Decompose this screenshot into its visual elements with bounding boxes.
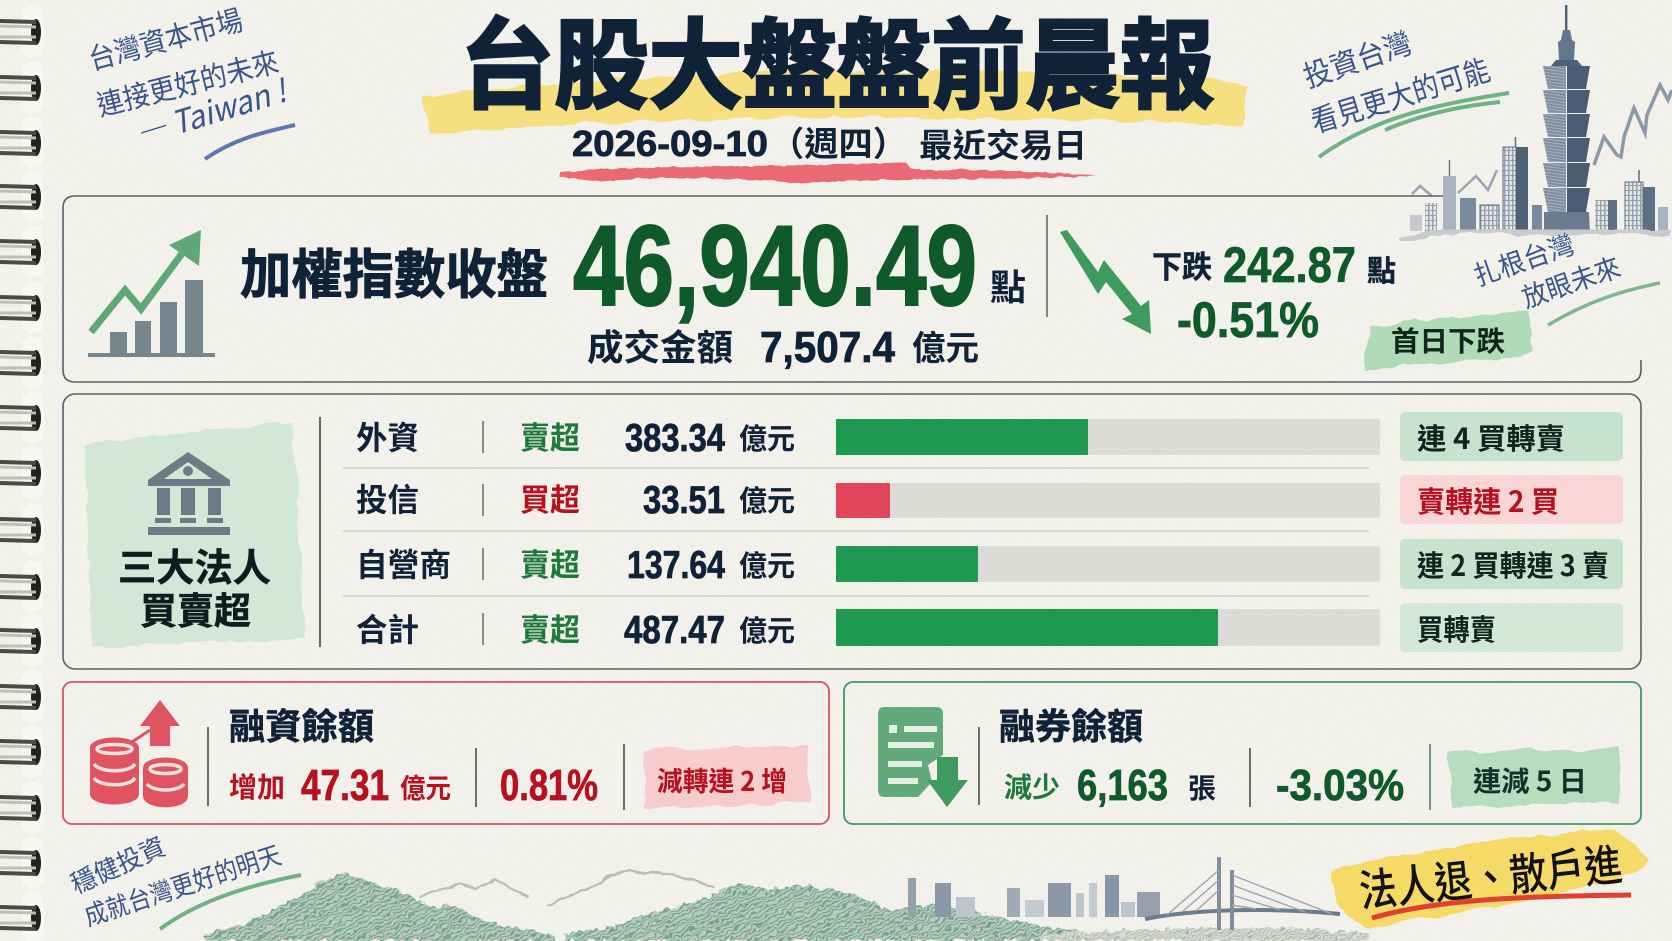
badge: first day down: 首日下跌 xyxy=(1391,320,1505,360)
illustration: city and bridge xyxy=(908,857,1340,930)
turnover: 7,507.4 xyxy=(760,323,895,372)
handwritten note: mid right: 放眼未來 xyxy=(1516,245,1625,316)
margin change value: 增加 xyxy=(229,766,285,806)
row: investment trust xyxy=(356,475,1623,524)
row: total xyxy=(356,603,1623,652)
turnover xyxy=(587,319,979,372)
index change xyxy=(1152,237,1396,348)
index change: 242.87 xyxy=(1223,237,1356,293)
row: dealers: 賣超 xyxy=(520,540,580,585)
badge: margin trend xyxy=(642,746,811,810)
spiral notebook binding xyxy=(0,5,44,941)
badge: short trend: 連減 5 日 xyxy=(1473,760,1587,800)
handwritten note: top right: 投資台灣 xyxy=(1297,18,1417,97)
panel: margin balance xyxy=(63,682,829,824)
handwritten note: bottom left: 成就台灣更好的明天 xyxy=(79,835,285,934)
row: dealers xyxy=(356,539,1623,589)
heading: index label: 加權指數收盤 xyxy=(240,233,548,309)
row: total: 買轉賣 xyxy=(1417,607,1496,649)
row: investment trust: 賣轉連 2 買 xyxy=(1417,479,1559,521)
icon: coins with up arrow xyxy=(90,700,188,807)
index value: 46,940.49 xyxy=(573,203,977,330)
illustration: mountains xyxy=(205,870,1370,941)
margin change value: 億元 xyxy=(400,767,451,806)
handwritten note: top right: 看見更大的可能 xyxy=(1305,45,1495,142)
short change value: 減少 xyxy=(1004,766,1060,806)
row: investment trust: 億元 xyxy=(739,478,795,520)
handwritten note: mid right: 扎根台灣 xyxy=(1468,223,1579,294)
row: foreign investors: 億元 xyxy=(739,416,795,458)
row: investment trust: 投信 xyxy=(356,475,419,521)
row: dealers: 連 2 買轉連 3 賣 xyxy=(1417,543,1609,585)
badge: short trend xyxy=(1450,748,1620,808)
date line with red underline xyxy=(560,117,1097,183)
row: total: 賣超 xyxy=(520,605,580,650)
handwritten note: top left xyxy=(83,0,295,159)
icon: falling arrow xyxy=(1060,230,1151,334)
handwritten note: mid right xyxy=(1468,223,1660,325)
row: investment trust: 33.51 xyxy=(643,479,725,522)
handwritten note: top left: 連接更好的未來 xyxy=(92,39,283,125)
badge: margin trend: 減轉連 2 增 xyxy=(657,760,787,799)
turnover: 成交金額 xyxy=(587,319,733,371)
row: dealers: 億元 xyxy=(739,543,795,585)
row: foreign investors xyxy=(356,412,1623,461)
index change: -0.51% xyxy=(1177,292,1319,348)
handwritten note: top left: — Taiwan ! xyxy=(129,66,294,156)
margin change percent: 0.81% xyxy=(500,761,598,810)
short change value: 張 xyxy=(1188,767,1216,807)
row: total: 億元 xyxy=(739,608,795,650)
label block: three institutions: 買賣超 xyxy=(140,581,251,635)
illustration: Taipei 101 skyline xyxy=(1400,5,1672,240)
row: foreign investors: 賣超 xyxy=(520,413,580,458)
icon: bank building xyxy=(148,452,230,535)
row: dealers: 137.64 xyxy=(627,544,725,587)
index unit: 點 xyxy=(990,259,1026,311)
row: total: 合計 xyxy=(356,605,419,651)
badge: first day down xyxy=(1364,309,1534,371)
short change percent: -3.03% xyxy=(1276,761,1404,810)
row: foreign investors: 383.34 xyxy=(625,417,725,460)
date line with red underline: （週四） xyxy=(770,117,907,166)
margin change value xyxy=(229,761,451,810)
label block: three institutions: 三大法人 xyxy=(118,537,271,592)
callout: conclusion: 法人退、散戶進 xyxy=(1356,829,1625,920)
icon: document with down arrow xyxy=(878,707,968,807)
panel: index close xyxy=(63,196,1641,382)
panel: institutional investors xyxy=(63,394,1641,669)
heading: margin balance: 融資餘額 xyxy=(229,698,374,750)
icon: rising chart xyxy=(88,230,215,355)
short change value xyxy=(1004,761,1216,810)
date line with red underline: 最近交易日 xyxy=(919,119,1087,167)
row: foreign investors: 外資 xyxy=(356,413,419,459)
date line with red underline: 2026-09-10 xyxy=(572,123,768,164)
handwritten note: top right xyxy=(1297,18,1509,157)
index change: 點 xyxy=(1367,248,1396,290)
margin change value: 47.31 xyxy=(301,761,389,810)
row: foreign investors: 連 4 買轉賣 xyxy=(1417,416,1565,458)
handwritten note: bottom left: 穩健投資 xyxy=(64,827,171,901)
turnover: 億元 xyxy=(912,321,979,370)
row: investment trust: 買超 xyxy=(520,475,580,520)
label block: three institutions xyxy=(85,422,304,647)
heading: short balance: 融券餘額 xyxy=(999,698,1143,750)
panel: short balance xyxy=(844,682,1641,824)
row: total: 487.47 xyxy=(624,609,725,652)
index change: 下跌 xyxy=(1152,242,1212,287)
row: dealers: 自營商 xyxy=(356,540,451,586)
short change value: 6,163 xyxy=(1077,761,1168,810)
